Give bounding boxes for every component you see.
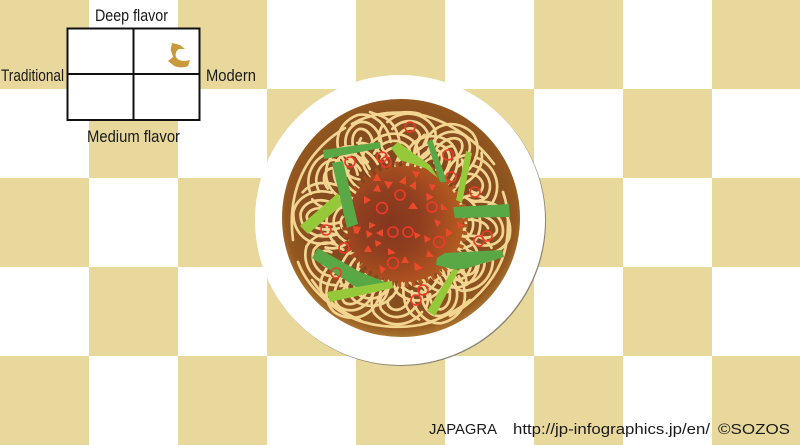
- credit line: http://jp-infographics.jp/en/: [513, 421, 711, 438]
- flavor positioning map: [1, 6, 256, 146]
- meat sauce center: [345, 164, 465, 284]
- plate: [255, 75, 546, 366]
- credit line: ©SOZOS: [718, 421, 790, 438]
- sauce base: [282, 99, 520, 337]
- label: top axis: Deep flavor: [95, 6, 168, 25]
- icon: Japan map marker: [168, 43, 190, 67]
- dark green pieces: [312, 139, 510, 290]
- light green pieces: [300, 142, 472, 316]
- credit line: JAPAGRA: [429, 421, 497, 438]
- map grid: [68, 28, 200, 120]
- label: left axis: Traditional: [1, 66, 64, 85]
- noodle dish illustration: [255, 75, 546, 366]
- chili flakes: [353, 171, 463, 274]
- label: bottom axis: Medium flavor: [87, 127, 180, 146]
- label: right axis: Modern: [206, 66, 256, 85]
- noodles: [291, 102, 513, 333]
- credit line: [429, 421, 790, 438]
- green onions: [300, 139, 510, 316]
- tomato rings: [321, 122, 492, 305]
